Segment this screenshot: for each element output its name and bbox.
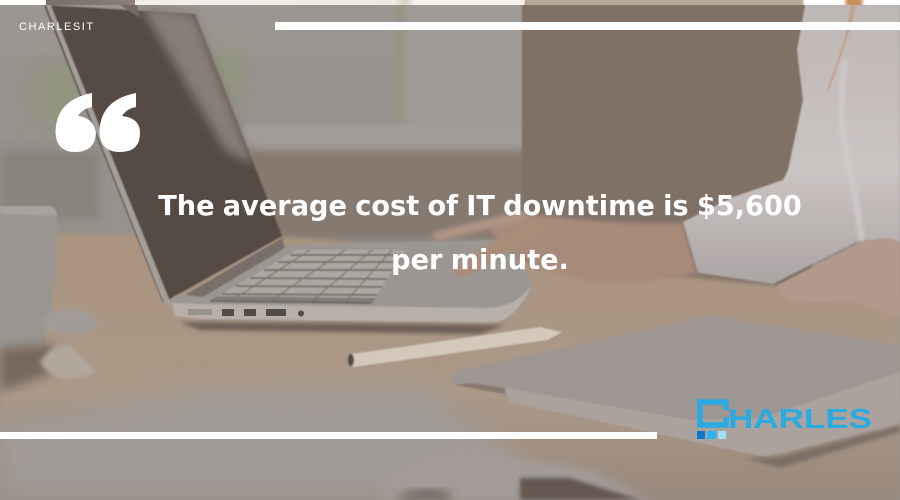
laptop ports (188, 309, 212, 315)
mug (0, 206, 97, 392)
icon: quotation mark (56, 93, 140, 152)
hair strands (828, 5, 855, 90)
bottom white bar (0, 432, 657, 439)
logo: Charles: HARLES (728, 403, 872, 434)
hand on keyboard (438, 212, 697, 283)
shirt and arm (683, 0, 900, 284)
pen (348, 327, 562, 367)
logo: Charles (697, 399, 872, 439)
notebook shadow (745, 425, 900, 468)
quote text (158, 191, 802, 276)
top unfaded photo strip (0, 0, 900, 5)
laptop screen (44, 0, 282, 303)
desk (0, 232, 900, 500)
brand label: CHARLESIT (19, 21, 95, 33)
laptop shadow (180, 322, 505, 334)
screen edge (45, 3, 172, 306)
grey desk reflection (0, 385, 540, 500)
shirt fold (841, 60, 862, 242)
laptop front edge (172, 284, 533, 323)
keyboard (210, 250, 405, 303)
foreground blurred object (380, 450, 650, 500)
quote text: per minute. (391, 245, 569, 276)
laptop base (172, 240, 533, 322)
quote text: The average cost of IT downtime is $5,600 (158, 191, 802, 222)
notebook (452, 316, 900, 457)
second hand (778, 238, 900, 318)
hinge bar (185, 238, 285, 297)
top white bar (275, 22, 900, 30)
